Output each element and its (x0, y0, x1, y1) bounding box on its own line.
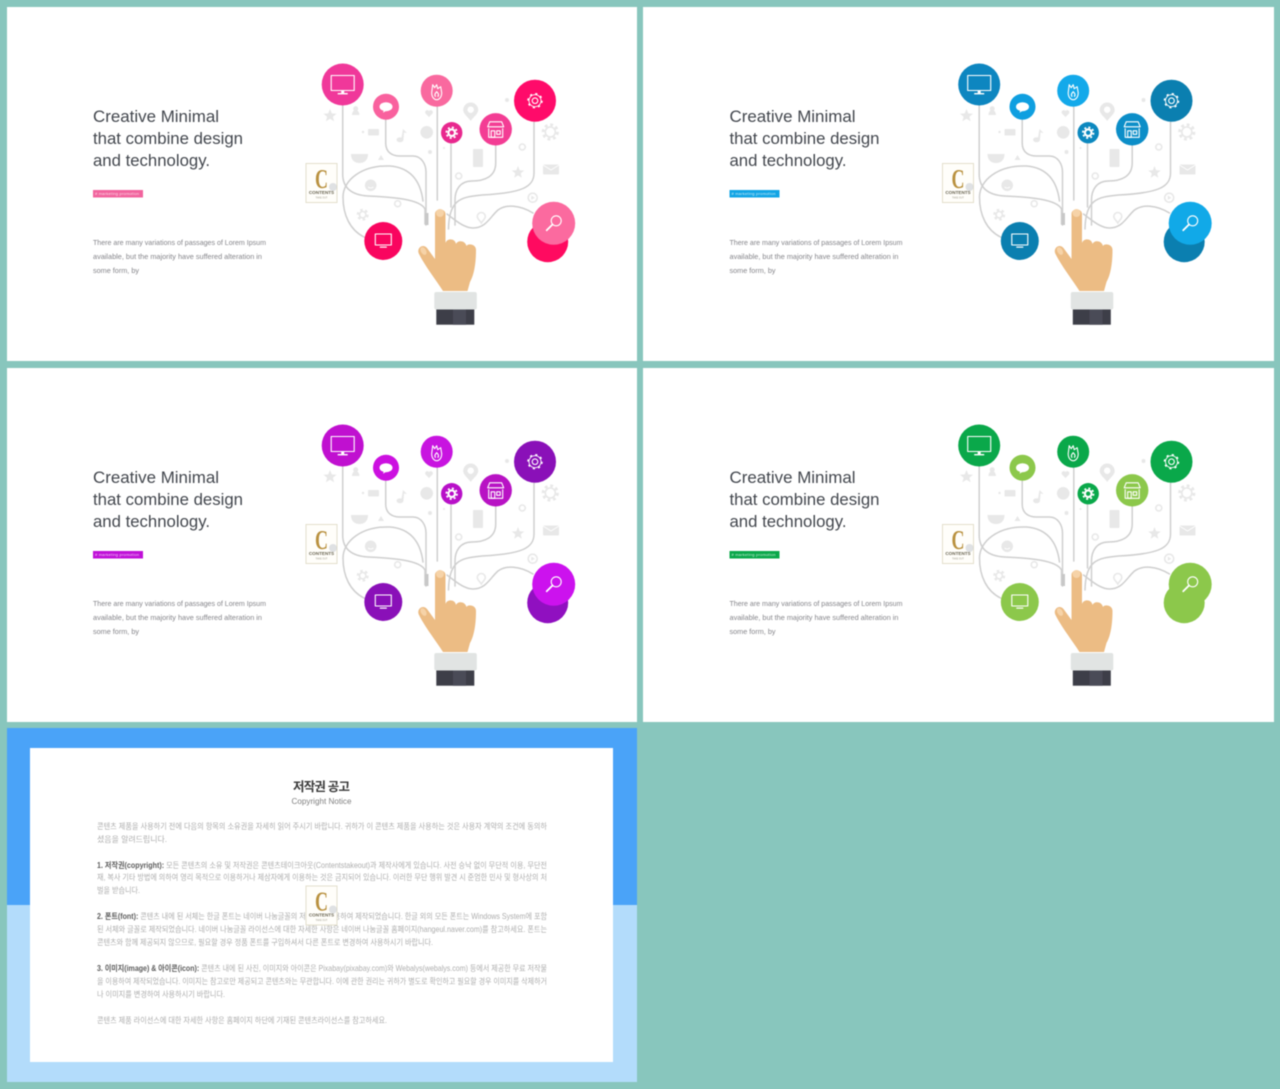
section 3 image and icon: 3. 이미지(image) & 아이콘(icon): 콘텐츠 내에 된 사진, 이미지와 아이콘은 Pixabay(pixabay.com)와 Webalys(webalys.com) 등에서 제공한 무료 저작물 (97, 963, 547, 973)
icon: store (480, 113, 512, 146)
body text (93, 599, 266, 636)
body text: available, but the majority have suffered alteration in (730, 613, 898, 622)
icon: speech bubble (373, 455, 399, 481)
intro paragraph: 셨음을 알려드립니다. (97, 834, 167, 844)
logo (306, 524, 337, 564)
icon: monitor (322, 424, 364, 466)
logo (306, 164, 337, 202)
icon: store (480, 474, 512, 506)
heading: Creative Minimal (730, 108, 856, 126)
heading (93, 108, 243, 170)
section 1 copyright: 벌을 받습니다. (97, 885, 140, 895)
icon: flame (1057, 75, 1089, 107)
tag: # marketing promotion (732, 191, 776, 196)
decorative dark circle (527, 221, 568, 262)
body text: some form, by (93, 627, 139, 636)
icon: search (1169, 563, 1212, 606)
icon: flame (1057, 436, 1089, 468)
section 1 copyright: 1. 저작권(copyright): 모든 콘텐츠의 소유 및 저작권은 콘텐츠테이크아웃(Contentstakeout)과 제작사에게 있습니다. 사전 승낙 없이 무단적 이용, 무단전 (97, 860, 547, 870)
hand pointing (418, 570, 477, 686)
panel: copyright notice (7, 728, 637, 1082)
section 2 font: 2. 폰트(font): 콘텐츠 내에 된 서체는 한글 폰트는 네이버 나눔글꼴의 저작물을 사용하여 제작되었습니다. 한글 외의 모든 폰트는 Windows System에 포함 (97, 911, 547, 921)
slide background (7, 368, 637, 722)
logo (942, 164, 974, 202)
tag: # marketing promotion (95, 552, 139, 557)
closing note: 콘텐츠 제품 라이선스에 대한 자세한 사항은 홈페이지 하단에 기재된 콘텐츠라이선스를 참고하세요. (97, 1015, 387, 1025)
tag: # marketing promotion (732, 552, 776, 557)
icon: small gear (441, 483, 462, 504)
icon: search (532, 563, 575, 606)
icon: small monitor (1001, 222, 1039, 260)
body text (730, 599, 902, 636)
icon: speech bubble (1010, 94, 1036, 120)
icon: small monitor (1001, 583, 1039, 621)
connector lines and grey background icons (324, 98, 559, 237)
panel: pink slide (7, 7, 637, 361)
body text: available, but the majority have suffered alteration in (93, 613, 262, 622)
tag (730, 551, 780, 558)
heading (730, 108, 880, 170)
slide background (643, 368, 1274, 722)
hand pointing (1055, 209, 1113, 325)
body text: some form, by (730, 627, 776, 636)
icon: large gear (514, 441, 556, 483)
logo (942, 524, 974, 564)
hand pointing (418, 209, 477, 325)
logo (306, 886, 337, 925)
icon: small gear (441, 122, 462, 143)
decorative dark circle (527, 582, 568, 623)
section 3 image and icon: 나 이미지를 변경하여 사용하시기 바랍니다. (97, 989, 225, 999)
heading: and technology. (730, 513, 846, 531)
hand pointing (1055, 570, 1113, 686)
slide background (643, 7, 1274, 361)
heading (93, 469, 243, 531)
icon: flame (421, 436, 453, 468)
intro paragraph (97, 821, 547, 844)
body text: available, but the majority have suffered alteration in (730, 252, 898, 261)
body text: some form, by (93, 266, 139, 275)
body text: There are many variations of passages of Lorem Ipsum (93, 238, 266, 247)
section 1 copyright: 재, 복사 기타 방법에 의하여 영리 목적으로 이용하거나 제삼자에게 이용하는 것은 금지되어 있습니다. 이러한 무단 행위 발견 시 준엄한 민사 및 형사상의 처 (97, 872, 547, 882)
section 2 font: 콘텐츠와 함께 제공되지 않으므로, 필요할 경우 정품 폰트를 구입하셔서 다른 폰트로 변경하여 사용하시기 바랍니다. (97, 937, 433, 947)
icon: large gear (514, 80, 556, 122)
tag (93, 190, 143, 198)
icon: speech bubble (1010, 455, 1036, 481)
icon: small gear (1078, 483, 1099, 504)
heading: and technology. (93, 152, 210, 170)
heading: that combine design (93, 491, 243, 509)
notice subheading: Copyright Notice (292, 796, 352, 806)
icon: small monitor (364, 222, 402, 260)
section 2 font: 된 서체와 글꼴로 제작되었습니다. 네이버 나눔글꼴 라이선스에 대한 자세한 사항은 네이버 나눔글꼴 홈페이지(hangeul.naver.com)를 참고하세요. 폰트는 (97, 924, 547, 934)
light blue lower band (7, 905, 637, 1082)
body text (93, 238, 266, 275)
body text: There are many variations of passages of Lorem Ipsum (93, 599, 266, 608)
heading: and technology. (730, 152, 846, 170)
section 3 image and icon: 을 이용하여 제작되었습니다. 이미지는 참고로만 제공되고 콘텐츠와는 무관합니다. 이에 관한 권리는 귀하가 별도로 확인하고 필요할 경우 이미지를 삭제하거 (97, 976, 547, 986)
icon: small gear (1078, 122, 1099, 143)
tag (730, 190, 780, 198)
body text (730, 238, 902, 275)
blue upper band (7, 728, 637, 905)
icon: search (1169, 202, 1212, 245)
tag (93, 551, 143, 558)
panel: purple slide (7, 368, 637, 722)
notice heading: 저작권 공고 (293, 779, 350, 794)
icon: monitor (322, 64, 364, 106)
intro paragraph: 콘텐츠 제품을 사용하기 전에 다음의 항목의 소유권을 자세히 읽어 주시기 바랍니다. 귀하가 이 콘텐츠 제품을 사용하는 것은 사용자 계약의 조건에 동의하 (97, 821, 547, 831)
icon: store (1116, 474, 1148, 506)
icon: large gear (1150, 80, 1192, 122)
heading: that combine design (730, 130, 880, 148)
heading: Creative Minimal (730, 469, 856, 487)
icon: monitor (958, 424, 1000, 466)
heading: that combine design (93, 130, 243, 148)
icon: search (532, 202, 575, 245)
tag: # marketing promotion (95, 191, 139, 196)
body text: available, but the majority have suffered alteration in (93, 252, 262, 261)
icon: store (1116, 113, 1148, 146)
heading: that combine design (730, 491, 880, 509)
section 2 font (97, 911, 547, 947)
icon: flame (421, 75, 453, 107)
body text: There are many variations of passages of Lorem Ipsum (730, 238, 902, 247)
panel: blue slide (643, 7, 1274, 361)
icon: large gear (1150, 441, 1192, 483)
body text: There are many variations of passages of Lorem Ipsum (730, 599, 902, 608)
body text: some form, by (730, 266, 776, 275)
connector lines and grey background icons (324, 459, 559, 598)
section 1 copyright (97, 860, 547, 895)
heading: Creative Minimal (93, 469, 219, 487)
icon: monitor (958, 64, 1000, 106)
heading (730, 469, 880, 531)
heading: Creative Minimal (93, 108, 219, 126)
decorative dark circle (1164, 221, 1205, 262)
connector lines and grey background icons (960, 98, 1196, 237)
icon: speech bubble (373, 94, 399, 120)
heading: and technology. (93, 513, 210, 531)
panel: green slide (643, 368, 1274, 722)
decorative dark circle (1164, 582, 1205, 623)
slide background (7, 7, 637, 361)
white card (30, 748, 613, 1062)
icon: small monitor (364, 583, 402, 621)
section 3 image and icon (97, 963, 547, 999)
connector lines and grey background icons (960, 459, 1196, 598)
